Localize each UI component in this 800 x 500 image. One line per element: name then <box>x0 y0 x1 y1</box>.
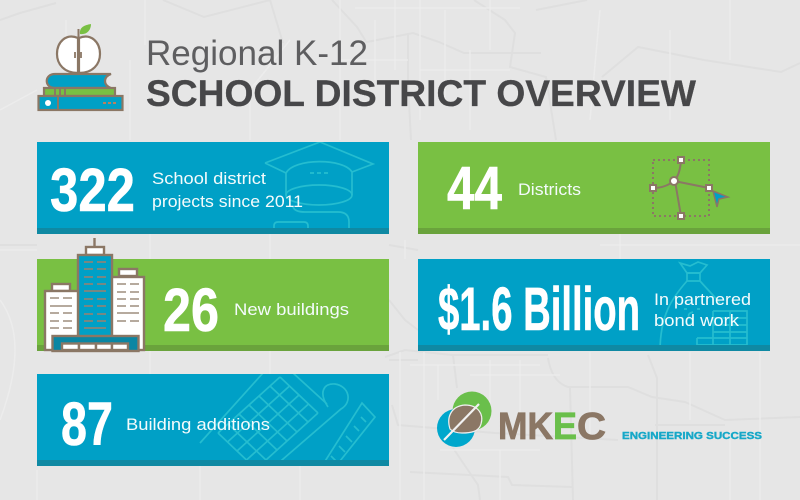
panel: 44 districts <box>418 142 770 234</box>
icon: graduation cap watermark <box>264 142 375 228</box>
panel: 87 additions <box>37 373 389 469</box>
stat: 44: 44 <box>447 154 502 222</box>
label: building additions: Building additions <box>126 415 270 434</box>
logo wordmark: C <box>577 406 606 448</box>
label line 2: bond work <box>654 311 740 330</box>
icon: money bag watermark <box>660 262 747 352</box>
panel: 26 new buildings <box>37 238 389 351</box>
stat: 26: 26 <box>163 276 219 344</box>
stat: $1.6 billion: $1.6 Billion <box>438 275 640 343</box>
icon: blueprint and ruler watermark <box>200 373 375 469</box>
label line 2: projects since 2011 <box>152 192 303 211</box>
tagline: ENGINEERING SUCCESS <box>622 431 762 442</box>
label: school district projects: School district <box>152 169 266 188</box>
icon: apple on books <box>38 24 122 110</box>
panel: 322 projects <box>37 142 389 240</box>
label: partnered bond work: In partnered <box>654 290 751 309</box>
panel: $1.6 billion <box>418 259 770 352</box>
apple <box>57 24 100 73</box>
title <box>146 34 696 114</box>
title line 2: SCHOOL DISTRICT OVERVIEW <box>146 73 696 114</box>
bottom book <box>38 96 122 110</box>
logo mark <box>437 392 492 447</box>
logo wordmark: MK <box>498 406 554 448</box>
title line 1: Regional K-12 <box>146 34 368 73</box>
logo wordmark: E <box>553 406 577 448</box>
top book <box>47 74 111 88</box>
middle book <box>44 88 115 96</box>
stat: 322: 322 <box>50 156 135 224</box>
label: districts: Districts <box>518 180 581 199</box>
logo: MKEC <box>437 392 762 448</box>
label: new buildings: New buildings <box>234 300 349 319</box>
icon: city buildings <box>45 238 144 351</box>
stat: 87: 87 <box>61 390 113 458</box>
logo wordmark <box>498 406 606 448</box>
icon: map selection <box>650 157 728 219</box>
